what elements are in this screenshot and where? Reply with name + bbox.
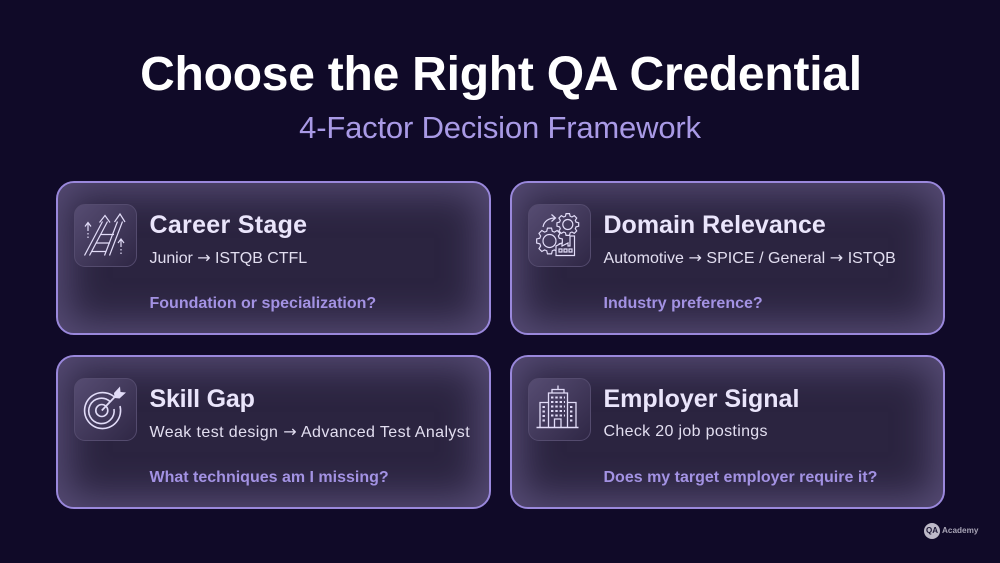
question: Does my target employer require it? [604,468,877,486]
title: Choose the Right QA Credential [140,48,862,100]
panel: career stage [56,181,491,335]
icon: target with arrow [74,378,137,441]
subtitle: 4-Factor Decision Framework [299,110,701,144]
icon: gears and factory [528,204,591,267]
question: What techniques am I missing? [150,468,389,486]
panel: domain relevance [510,181,945,335]
mapping text: Junior → ISTQB CTFL [150,248,307,266]
mapping text: Weak test design → Advanced Test Analyst [150,422,470,440]
panel: skill gap [56,355,491,509]
mapping text: Automotive → SPICE / General → ISTQB [604,248,896,266]
icon: office building [528,378,591,441]
heading: Employer Signal [604,384,799,412]
question: Foundation or specialization? [150,294,376,312]
panel: employer signal [510,355,945,509]
logo badge: QA [926,526,938,535]
logo: QA Academy [924,523,978,539]
logo badge [924,523,940,539]
logo wordmark: Academy [942,526,978,535]
heading: Skill Gap [150,384,255,412]
mapping text: Check 20 job postings [604,422,768,440]
icon: ladder with arrows [74,204,137,267]
question: Industry preference? [604,294,763,312]
heading: Domain Relevance [604,210,826,238]
heading: Career Stage [150,210,307,238]
